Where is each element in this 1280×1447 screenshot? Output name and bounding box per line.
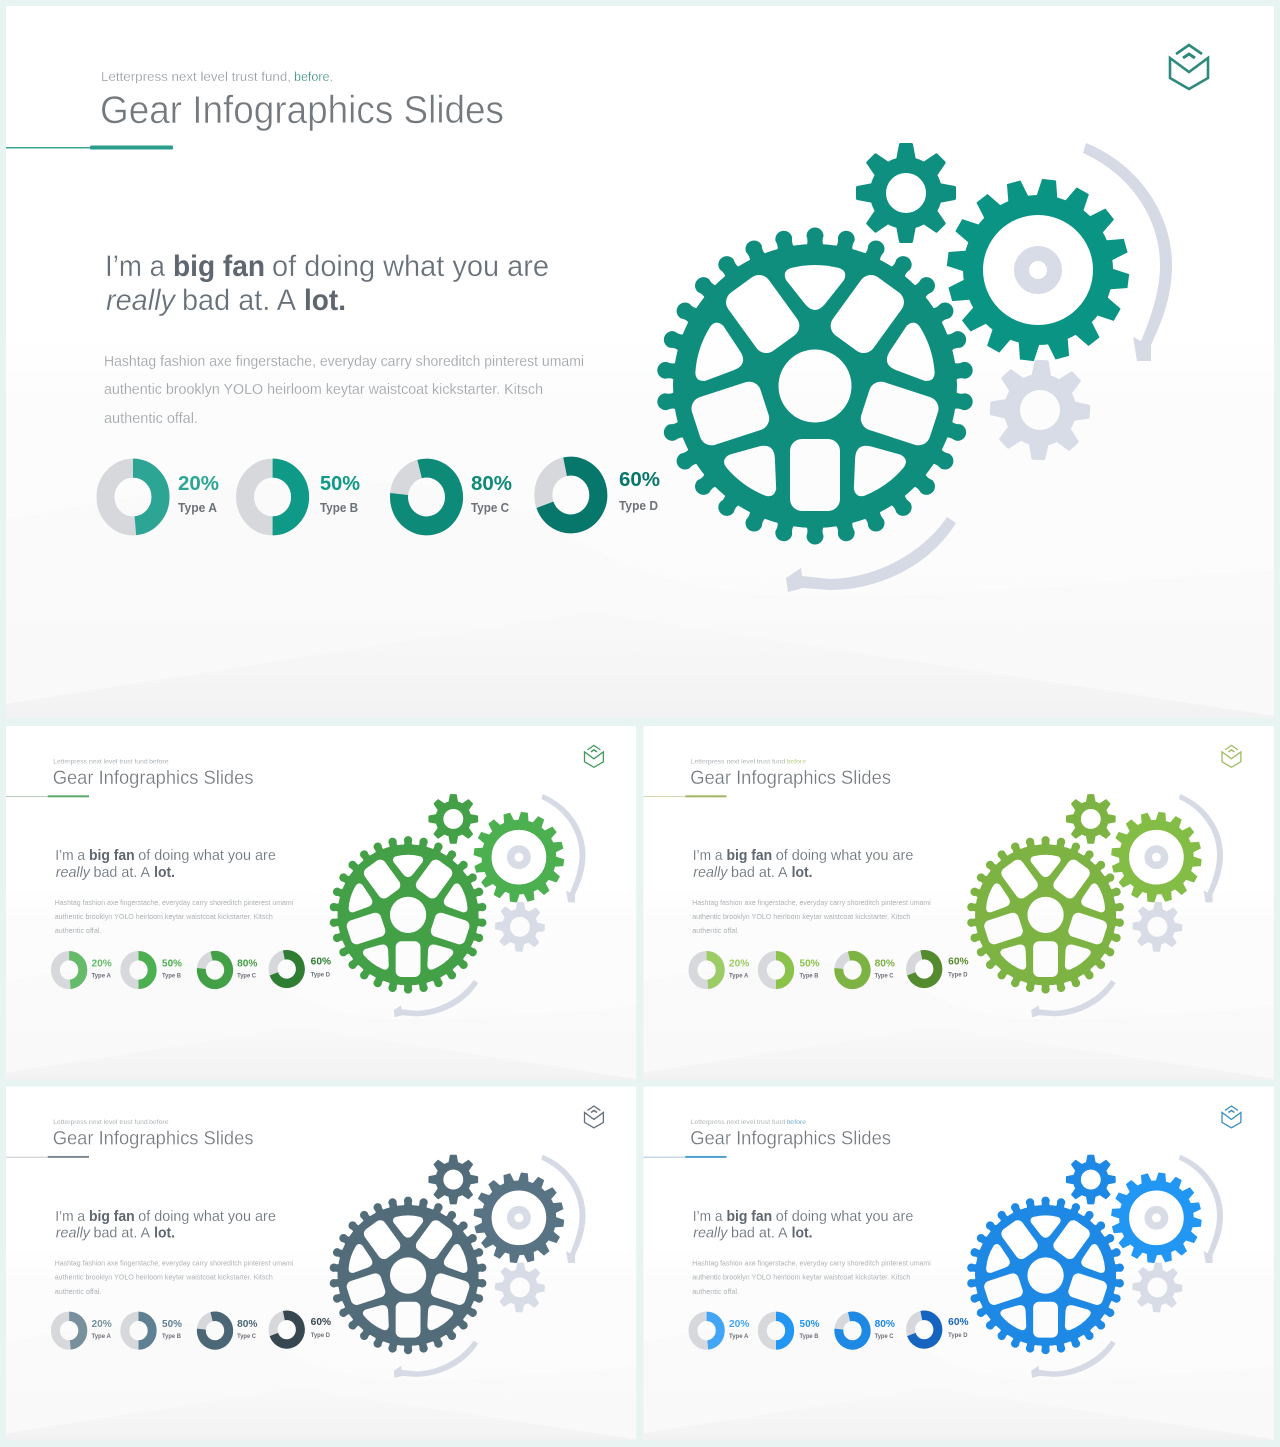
heading: bad at. A — [182, 284, 296, 317]
body text — [692, 898, 931, 935]
body text — [692, 1259, 931, 1296]
icon: large spoked gear — [967, 1197, 1125, 1354]
title underline — [6, 146, 173, 150]
body text: Hashtag fashion axe fingerstache, everyday carry shoreditch pinterest umami — [692, 898, 931, 907]
heading: bad at. A — [93, 865, 150, 881]
icon: small grey gear — [495, 1262, 545, 1312]
panel: slate slide — [6, 1087, 636, 1440]
donut chart: Type C 80%: 80% — [875, 959, 895, 970]
arrow: right curved — [541, 1155, 586, 1263]
donut chart: Type A 20%: 20% — [729, 959, 750, 970]
heading — [105, 250, 549, 317]
donut chart: Type C 80%: Type C — [237, 972, 256, 979]
body text: Hashtag fashion axe fingerstache, everyday carry shoreditch pinterest umami — [692, 1259, 931, 1268]
heading: of doing what you are — [272, 250, 549, 283]
donut chart: Type D 60%: Type D — [311, 1332, 331, 1339]
donut chart: Type D 60%: 60% — [311, 957, 331, 968]
body text: authentic offal. — [55, 1287, 101, 1296]
heading: lot. — [792, 865, 812, 881]
donut chart: Type D 60%: Type D — [619, 499, 658, 513]
body text: Hashtag fashion axe fingerstache, everyday carry shoreditch pinterest umami — [55, 898, 294, 907]
donut chart: Type A 20%: Type A — [729, 972, 749, 979]
heading: big fan — [726, 1209, 772, 1225]
body text: authentic offal. — [104, 411, 198, 427]
body text: authentic brooklyn YOLO heirloom keytar waistcoat kickstarter. Kitsch — [104, 382, 543, 398]
icon: small top gear — [858, 144, 954, 242]
icon: medium gear — [1111, 1172, 1202, 1263]
donut chart: Type B 50%: Type B — [162, 972, 181, 979]
body text: authentic brooklyn YOLO heirloom keytar waistcoat kickstarter. Kitsch — [692, 912, 910, 921]
donut chart: Type D 60%: Type D — [948, 971, 968, 978]
icon: large spoked gear — [967, 836, 1125, 994]
donut chart: Type C 80%: 80% — [237, 1319, 258, 1330]
icon: small top gear — [429, 1155, 477, 1204]
donut chart: Type D 60%: 60% — [948, 1317, 969, 1328]
donut chart: Type D 60%: Type D — [948, 1332, 968, 1339]
donut chart: Type C 80% — [836, 953, 895, 988]
icon: large spoked gear — [329, 1197, 487, 1354]
donut chart: Type A 20%: Type A — [178, 501, 217, 515]
icon: small grey gear — [1132, 902, 1182, 952]
donut chart: Type D 60% — [270, 1313, 331, 1347]
donut chart: Type B 50%: Type B — [800, 972, 819, 979]
heading: I’m a — [693, 848, 723, 864]
donut chart: Type D 60%: Type D — [311, 971, 331, 978]
donut chart: Type D 60% — [270, 952, 331, 986]
heading: bad at. A — [731, 1226, 788, 1242]
donut chart: Type D 60% — [908, 952, 969, 986]
arrow: right curved — [1179, 1155, 1223, 1263]
heading: lot. — [154, 1226, 175, 1242]
donut chart: Type B 50%: 50% — [800, 959, 820, 970]
body text — [55, 1259, 294, 1296]
title: Gear Infographics Slides — [53, 1128, 254, 1150]
donut chart: Type A 20%: 20% — [91, 959, 112, 970]
heading: really — [693, 865, 729, 881]
arrow: right curved — [1083, 143, 1172, 361]
icon: small top gear — [1067, 795, 1115, 843]
donut chart: Type B 50% — [245, 468, 360, 526]
heading: lot. — [154, 865, 175, 881]
arrow: right curved — [1179, 794, 1223, 902]
icon: cube logo — [1170, 45, 1208, 89]
donut chart: Type B 50%: Type B — [800, 1333, 819, 1340]
icon: cube logo — [1222, 1106, 1241, 1128]
donut chart: Type C 80% — [198, 1313, 258, 1348]
body text — [104, 354, 584, 427]
icon: large spoked gear — [329, 836, 487, 994]
title underline — [644, 795, 726, 797]
panel: lime slide — [644, 726, 1274, 1080]
donut chart: Type B 50% — [762, 1316, 820, 1345]
icon: small top gear — [1067, 1155, 1115, 1204]
heading: really — [56, 1226, 91, 1242]
icon: medium gear — [473, 1172, 564, 1263]
arrow: bottom curved — [394, 980, 478, 1017]
donut chart: Type B 50%: 50% — [162, 959, 182, 970]
donut chart: Type C 80%: Type C — [875, 972, 894, 979]
icon: cube logo — [1222, 745, 1241, 767]
heading: big fan — [89, 848, 135, 864]
icon: small grey gear — [1132, 1262, 1182, 1312]
donut chart: Type C 80%: 80% — [237, 959, 258, 970]
arrow: bottom curved — [1031, 1341, 1116, 1378]
subtitle: Letterpress next level trust fund — [691, 1119, 786, 1126]
heading: really — [106, 284, 177, 317]
donut chart: Type A 20%: 20% — [178, 473, 219, 495]
heading: I’m a — [105, 250, 165, 283]
donut chart: Type B 50%: Type B — [162, 1333, 181, 1340]
heading: bad at. A — [93, 1226, 150, 1242]
icon: medium gear — [473, 812, 564, 903]
donut chart: Type C 80%: 80% — [875, 1319, 895, 1330]
donut chart: Type B 50%: 50% — [320, 473, 360, 495]
donut chart: Type A 20%: Type A — [91, 1333, 111, 1340]
donut chart: Type D 60%: 60% — [311, 1317, 331, 1328]
body text: authentic brooklyn YOLO heirloom keytar waistcoat kickstarter. Kitsch — [692, 1272, 910, 1281]
subtitle: before — [149, 758, 169, 765]
icon: large spoked gear — [656, 228, 974, 544]
donut chart: Type A 20%: 20% — [729, 1319, 750, 1330]
panel: green slide — [6, 726, 636, 1080]
donut chart: Type C 80% — [198, 953, 258, 988]
heading: of doing what you are — [776, 848, 913, 864]
arrow: right curved — [541, 794, 586, 902]
heading: I’m a — [693, 1209, 723, 1225]
body text: authentic brooklyn YOLO heirloom keytar waistcoat kickstarter. Kitsch — [55, 912, 273, 921]
heading: I’m a — [55, 848, 86, 864]
heading: of doing what you are — [776, 1209, 913, 1225]
panel: blue slide — [644, 1087, 1274, 1440]
title: Gear Infographics Slides — [690, 767, 891, 789]
donut chart: Type B 50%: Type B — [320, 501, 358, 515]
heading — [693, 848, 913, 881]
heading — [55, 848, 276, 881]
icon: small grey gear — [990, 360, 1090, 460]
heading: lot. — [792, 1226, 812, 1242]
icon: medium gear — [946, 178, 1130, 362]
title underline — [644, 1156, 726, 1158]
heading: of doing what you are — [138, 1209, 276, 1225]
arrow: bottom curved — [1031, 980, 1116, 1017]
panel: main teal slide — [6, 6, 1274, 718]
body text: authentic brooklyn YOLO heirloom keytar waistcoat kickstarter. Kitsch — [55, 1272, 273, 1281]
donut chart: Type A 20%: Type A — [729, 1333, 749, 1340]
arrow: bottom curved — [394, 1341, 478, 1378]
donut chart: Type B 50%: 50% — [800, 1319, 820, 1330]
icon: cube logo — [585, 1106, 603, 1128]
body text: authentic offal. — [692, 926, 739, 935]
body text: authentic offal. — [55, 926, 101, 935]
subtitle: before — [149, 1119, 169, 1126]
donut chart: Type B 50%: 50% — [162, 1319, 182, 1330]
body text — [55, 898, 294, 935]
donut chart: Type A 20% — [693, 956, 750, 984]
donut chart: Type A 20%: Type A — [91, 972, 111, 979]
icon: small top gear — [429, 795, 477, 843]
arrow: bottom curved — [786, 517, 956, 592]
donut chart: Type D 60% — [538, 461, 660, 529]
donut chart: Type C 80%: 80% — [471, 473, 512, 495]
donut chart: Type A 20% — [55, 956, 112, 984]
heading — [693, 1209, 913, 1242]
subtitle: before — [787, 758, 806, 765]
subtitle: before. — [294, 69, 333, 84]
icon: cube logo — [585, 745, 603, 767]
donut chart: Type C 80% — [393, 462, 512, 532]
donut chart: Type D 60%: 60% — [619, 469, 660, 491]
donut chart: Type A 20% — [106, 468, 219, 526]
subtitle: Letterpress next level trust fund, — [101, 69, 291, 84]
donut chart: Type D 60%: 60% — [948, 957, 969, 968]
heading — [55, 1209, 276, 1242]
heading: big fan — [89, 1209, 135, 1225]
body text: authentic offal. — [692, 1287, 739, 1296]
donut chart: Type D 60% — [908, 1313, 969, 1347]
donut chart: Type B 50% — [762, 956, 820, 984]
donut chart: Type C 80%: Type C — [237, 1333, 256, 1340]
heading: big fan — [173, 250, 265, 283]
heading: of doing what you are — [138, 848, 276, 864]
heading: big fan — [726, 848, 772, 864]
title underline — [6, 795, 89, 797]
title: Gear Infographics Slides — [100, 89, 504, 132]
donut chart: Type C 80% — [836, 1313, 895, 1348]
heading: I’m a — [55, 1209, 86, 1225]
donut chart: Type A 20% — [55, 1316, 112, 1345]
heading: lot. — [304, 284, 346, 317]
donut chart: Type B 50% — [125, 1316, 182, 1345]
heading: really — [693, 1226, 729, 1242]
donut chart: Type B 50% — [125, 956, 182, 984]
heading: really — [56, 865, 91, 881]
icon: medium gear — [1111, 812, 1202, 903]
title underline — [6, 1156, 89, 1158]
subtitle: Letterpress next level trust fund — [53, 758, 148, 765]
donut chart: Type C 80%: Type C — [875, 1333, 894, 1340]
donut chart: Type C 80%: Type C — [471, 501, 509, 515]
subtitle: Letterpress next level trust fund — [691, 758, 786, 765]
donut chart: Type A 20% — [693, 1316, 750, 1345]
title: Gear Infographics Slides — [690, 1128, 891, 1150]
body text: Hashtag fashion axe fingerstache, everyday carry shoreditch pinterest umami — [104, 354, 584, 370]
subtitle: Letterpress next level trust fund — [53, 1119, 148, 1126]
title: Gear Infographics Slides — [53, 767, 254, 789]
donut chart: Type A 20%: 20% — [91, 1319, 112, 1330]
icon: small grey gear — [495, 902, 545, 952]
body text: Hashtag fashion axe fingerstache, everyday carry shoreditch pinterest umami — [55, 1259, 294, 1268]
heading: bad at. A — [731, 865, 788, 881]
subtitle: before — [787, 1119, 806, 1126]
